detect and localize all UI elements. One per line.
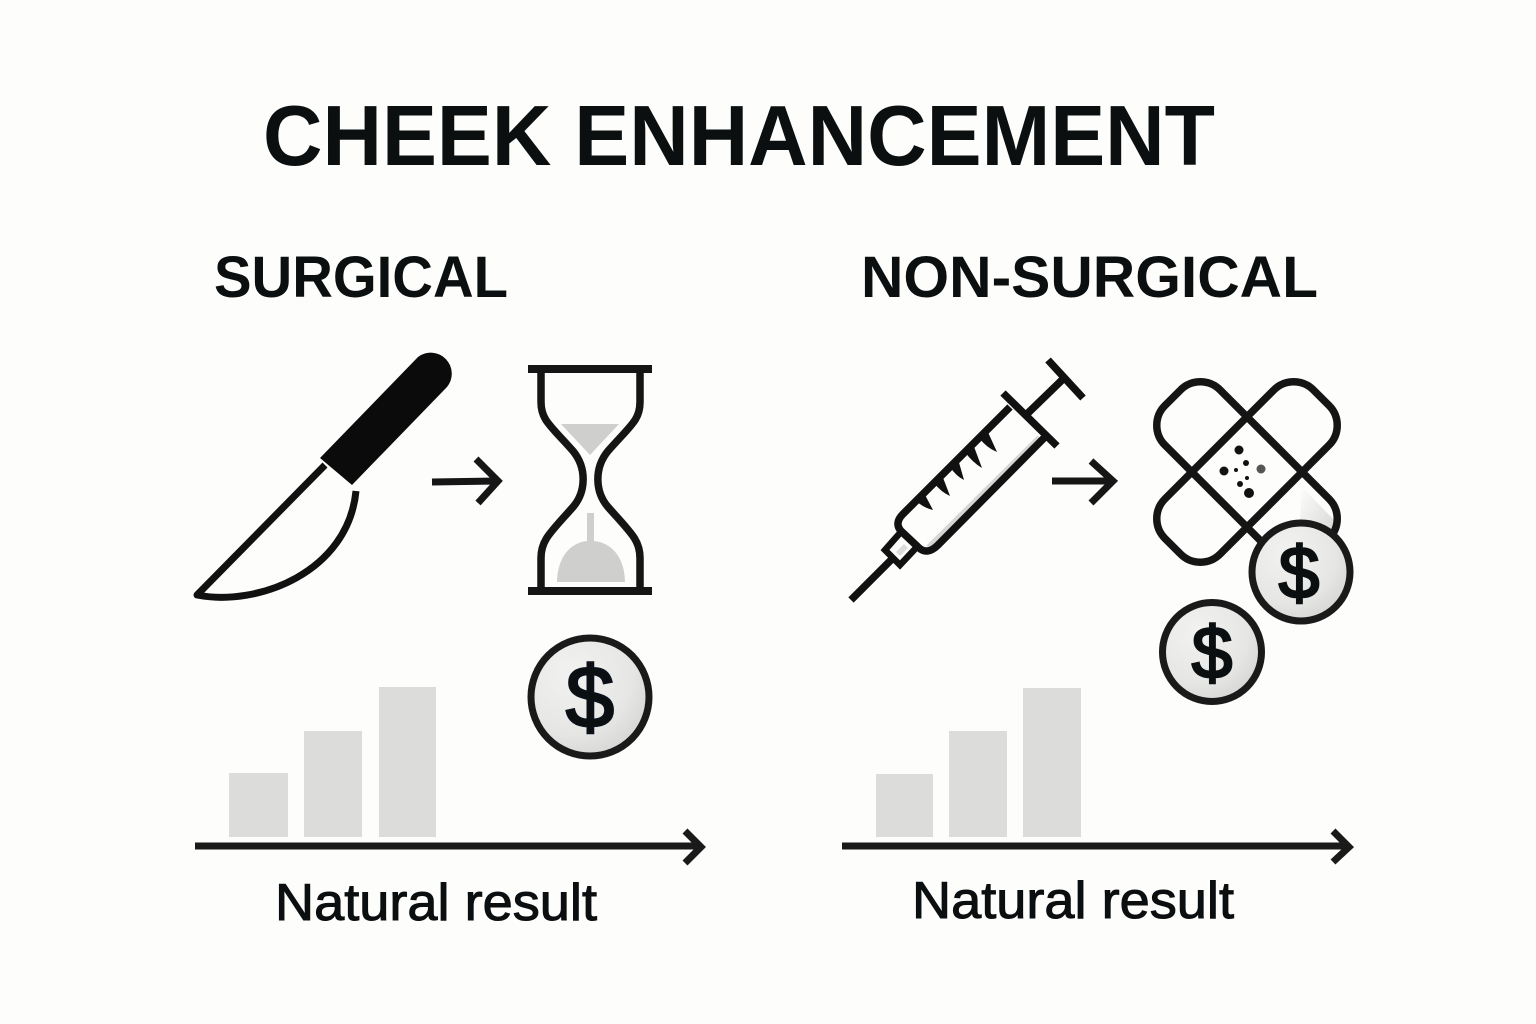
heading: non-surgical: NON-SURGICAL xyxy=(861,245,1318,310)
arrow: syringe to bandage xyxy=(1052,461,1113,503)
icon: bandage xyxy=(1145,370,1349,574)
panel: non-surgical xyxy=(842,245,1350,930)
icon: scalpel xyxy=(197,353,452,597)
icon: coin xyxy=(531,638,649,756)
label: natural result: Natural result xyxy=(912,872,1235,930)
icon: syringe xyxy=(851,360,1083,600)
arrow: result axis xyxy=(842,831,1349,862)
panel: surgical xyxy=(195,245,701,932)
bar chart: surgical xyxy=(229,687,436,837)
heading: surgical: SURGICAL xyxy=(214,245,508,310)
icon: hourglass xyxy=(528,365,652,595)
title: CHEEK ENHANCEMENT xyxy=(263,89,1215,184)
arrow: result axis xyxy=(195,831,701,863)
bar chart: non-surgical xyxy=(876,688,1081,837)
icon: coin lower: $ xyxy=(1192,613,1232,694)
icon: coin: $ xyxy=(566,649,614,746)
icon: coin upper xyxy=(1252,523,1350,621)
icon: coin upper: $ xyxy=(1279,533,1319,614)
label: natural result: Natural result xyxy=(275,874,598,932)
icon: coin lower xyxy=(1162,602,1262,702)
arrow: scalpel to hourglass xyxy=(432,459,498,503)
